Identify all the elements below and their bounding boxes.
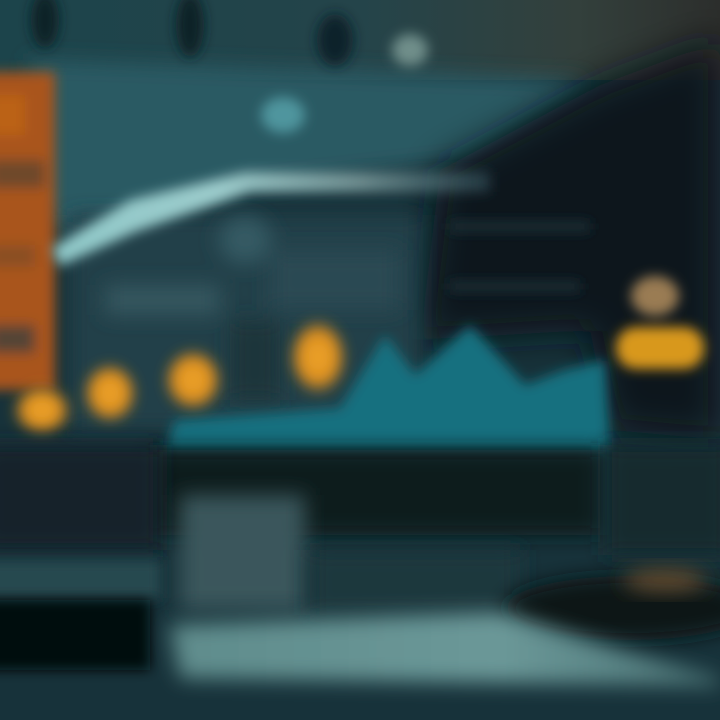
grey centre block bbox=[180, 495, 305, 610]
right dark panel bbox=[605, 445, 720, 555]
lower left dark block bbox=[0, 445, 160, 550]
light streak bbox=[52, 172, 490, 266]
pale desk surface bbox=[170, 612, 720, 686]
panel detail blobs bbox=[105, 216, 400, 400]
left teal shelf bbox=[0, 560, 160, 598]
right low black shape bbox=[505, 576, 720, 640]
dark chart bars bbox=[450, 222, 590, 291]
centre lower block bbox=[310, 550, 520, 615]
top band bbox=[0, 0, 720, 80]
orange side panel bbox=[0, 72, 55, 390]
upper teal wall bbox=[30, 60, 590, 235]
right dark wall bbox=[420, 40, 720, 440]
left black block bbox=[0, 600, 150, 670]
hanging lights at top bbox=[31, 0, 428, 66]
teal area chart bbox=[165, 325, 610, 450]
central dashboard panel bbox=[70, 215, 420, 430]
lower dark desk band bbox=[150, 450, 600, 535]
bright spot bbox=[261, 97, 305, 133]
lamp on the right bbox=[616, 276, 704, 369]
orange glowing nodes bbox=[11, 317, 349, 437]
small orange reflection bbox=[623, 568, 707, 592]
